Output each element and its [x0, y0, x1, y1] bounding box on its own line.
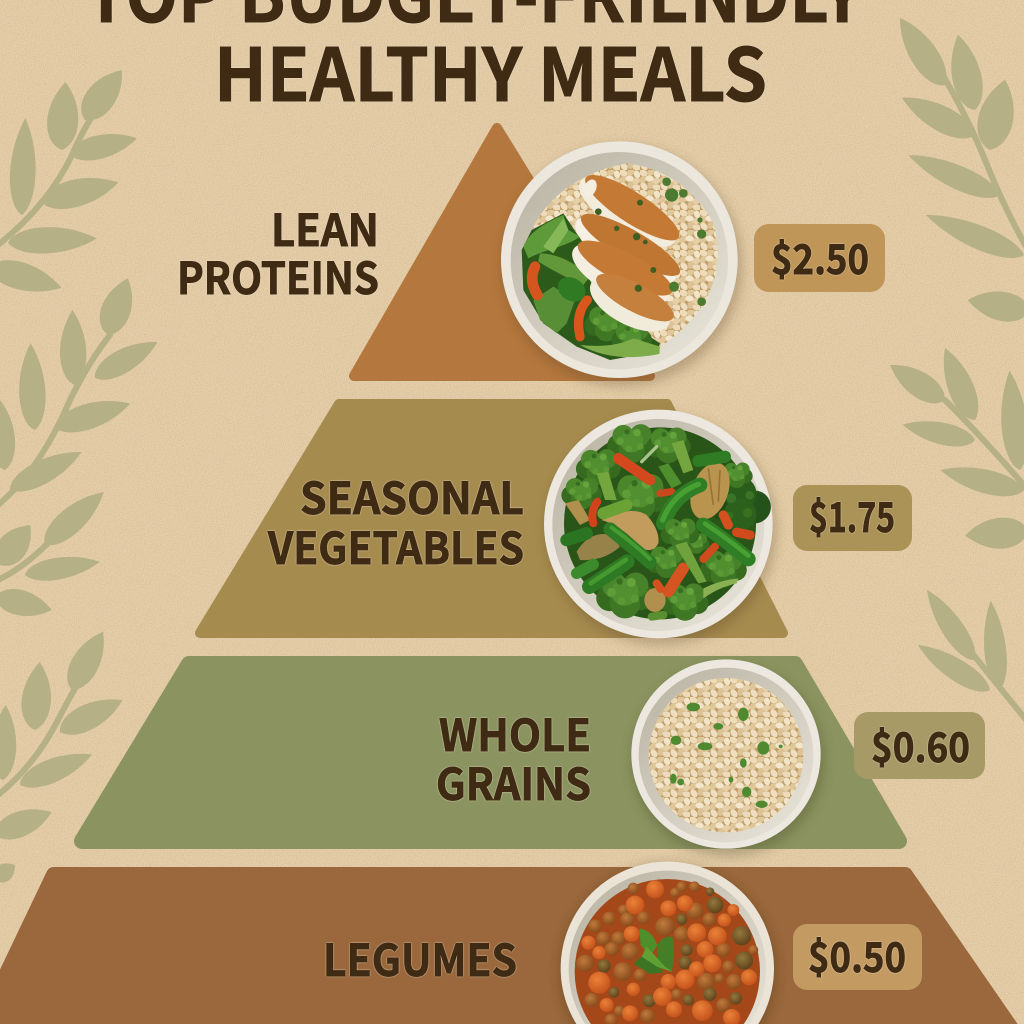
label: seasonal vegetables: SEASONAL [300, 463, 524, 527]
title [85, 0, 863, 123]
left leaf branch, middle [0, 273, 163, 622]
pyramid tier 4: legumes [0, 875, 1012, 1024]
label: lean proteins: PROTEINS [177, 243, 379, 307]
label: whole grains [436, 700, 591, 813]
bowl: brown rice [631, 659, 824, 856]
price tag: seasonal vegetables: $1.75 [809, 484, 895, 544]
label: legumes: LEGUMES [323, 925, 517, 989]
left leaf branch, bottom [0, 625, 128, 887]
right leaf branch, top [888, 11, 1024, 325]
pyramid tier 2: seasonal vegetables [200, 404, 783, 633]
garnish [634, 928, 673, 974]
bowl: chicken, rice and greens [501, 141, 742, 386]
price tag: lean proteins: $2.50 [771, 226, 869, 286]
right leaf branch, bottom [912, 584, 1024, 722]
label: whole grains: WHOLE [439, 700, 591, 764]
title: HEALTHY MEALS [214, 17, 767, 123]
bowl: lentil stew [560, 862, 776, 1024]
label: seasonal vegetables: VEGETABLES [267, 513, 524, 577]
pyramid tier 3: whole grains [82, 664, 899, 841]
price tag: legumes: $0.50 [808, 924, 906, 984]
right leaf branch, middle [883, 343, 1024, 552]
bowl: stir-fried vegetables [544, 410, 776, 645]
pyramid tier 1: lean proteins [354, 128, 650, 376]
label: lean proteins: LEAN [271, 195, 379, 259]
label: whole grains: GRAINS [436, 749, 591, 813]
price tag: whole grains: $0.60 [871, 714, 970, 774]
label: lean proteins [177, 195, 379, 307]
label: seasonal vegetables [267, 463, 524, 577]
left leaf branch, top [0, 61, 140, 300]
